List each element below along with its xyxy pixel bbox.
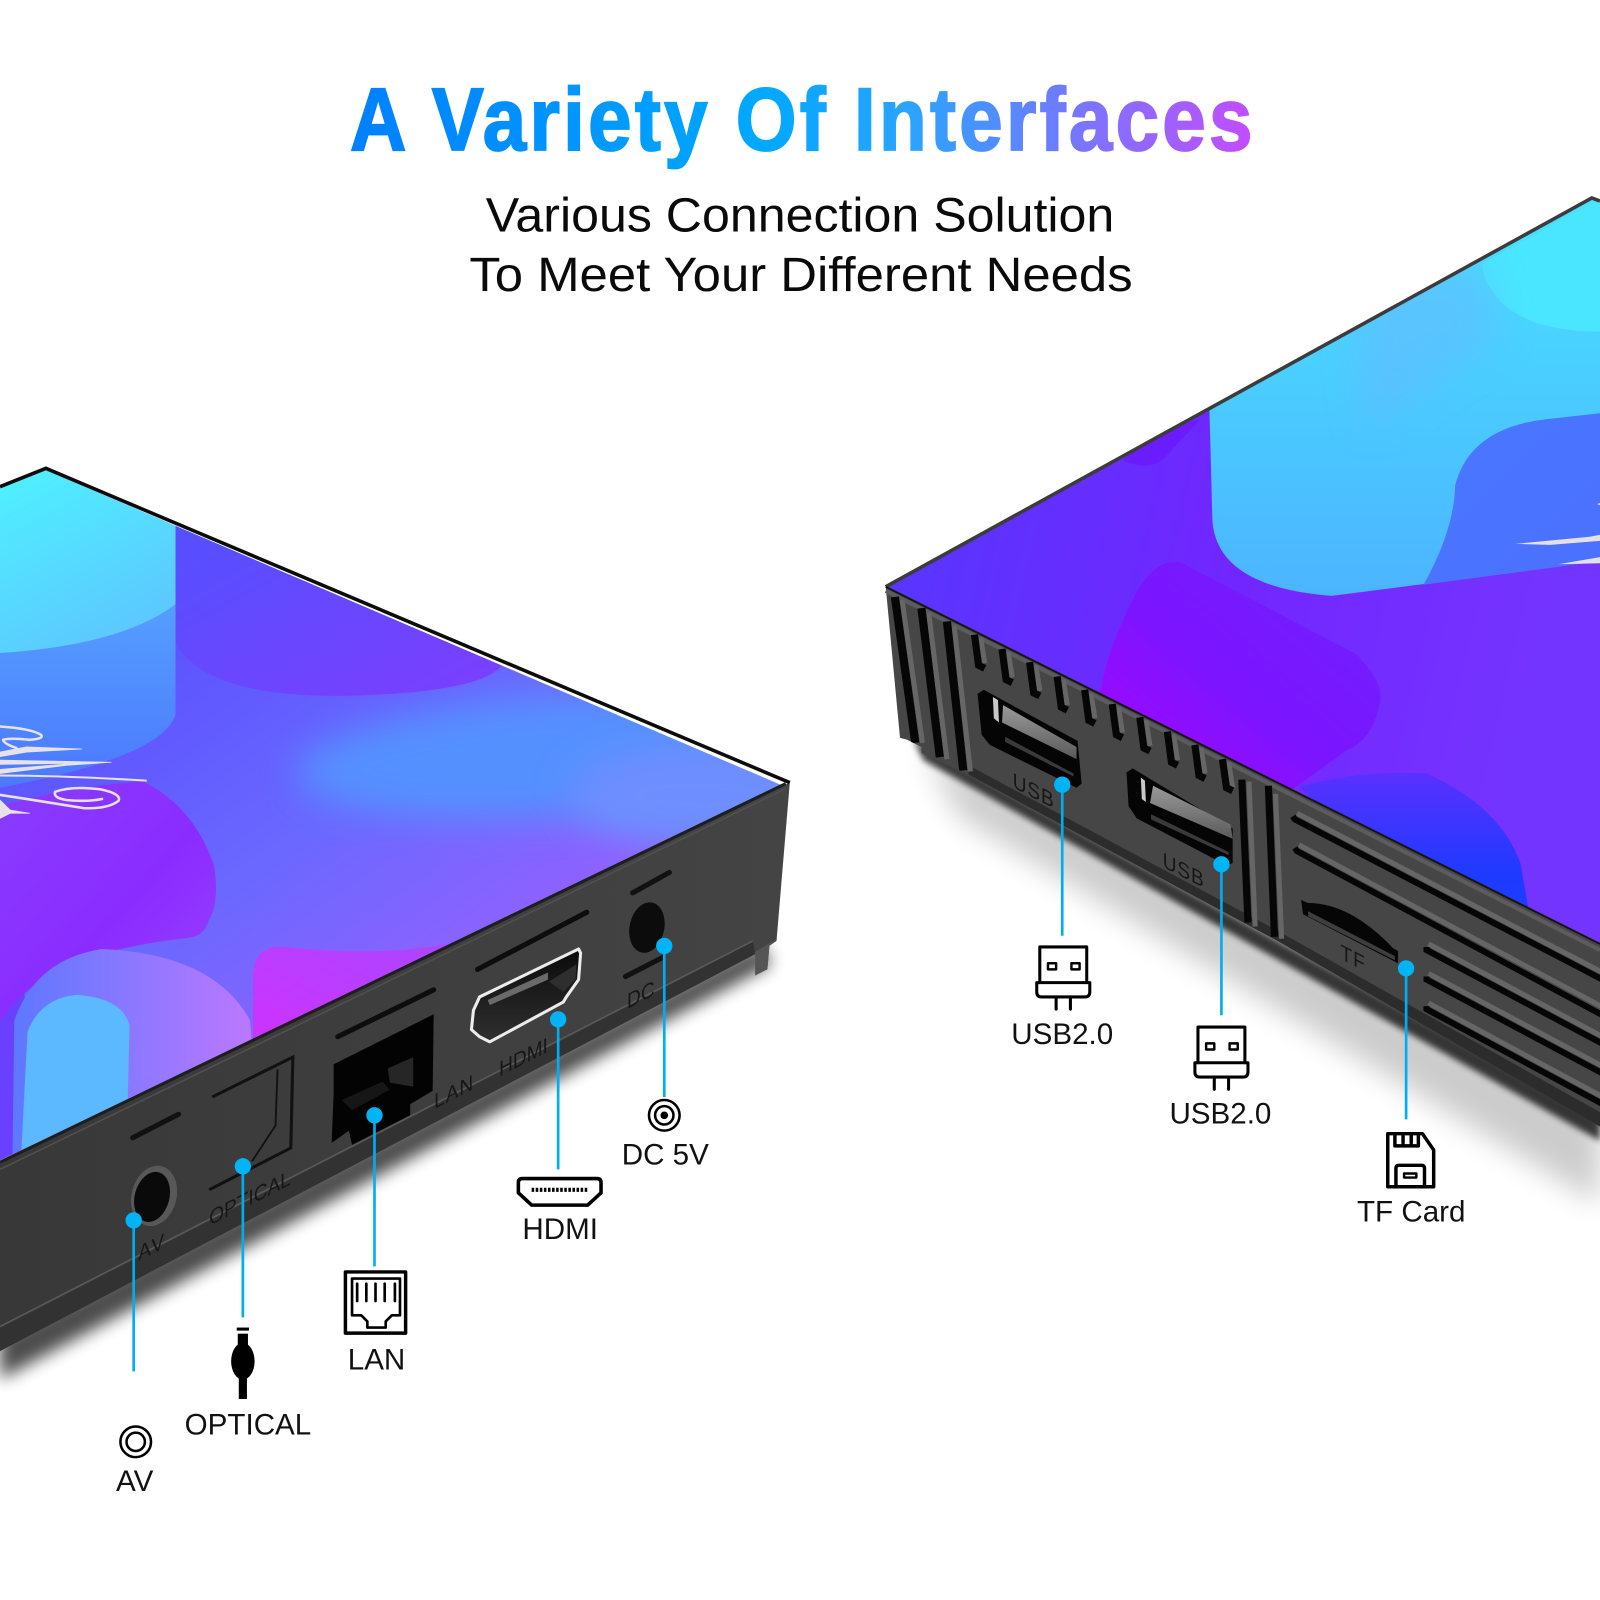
- callout: DC 5V: [622, 938, 709, 1171]
- callout: LAN: LAN: [348, 1343, 405, 1376]
- USB port two: [1127, 768, 1233, 893]
- right box body: [886, 587, 1600, 1127]
- callout: AV: AV: [116, 1465, 154, 1498]
- icon: DC jack: [649, 1100, 680, 1131]
- AV port: [124, 1114, 184, 1266]
- optical port: [209, 1057, 293, 1231]
- DC port: DC: [627, 976, 655, 1014]
- callout: USB2.0 second: USB2.0: [1169, 1097, 1271, 1130]
- title: A Variety Of Interfaces: [350, 69, 1252, 169]
- USB port one: USB: [1013, 768, 1055, 814]
- callout: USB2.0 first: USB2.0: [1011, 1018, 1113, 1051]
- subtitle: Various Connection Solution: [486, 189, 1114, 243]
- icon: AV ring: [120, 1427, 151, 1457]
- callout: OPTICAL: OPTICAL: [185, 1409, 311, 1442]
- left box top screen art: [0, 470, 780, 1160]
- LAN port: [332, 990, 474, 1145]
- left TV box: [0, 449, 851, 1351]
- right TV box: [878, 184, 1600, 1127]
- shadow under left box: [0, 944, 771, 1380]
- callout: HDMI: HDMI: [522, 1213, 598, 1246]
- left box edges: [0, 468, 790, 1169]
- callout: AV: [116, 1212, 154, 1498]
- TF card slot: [1301, 900, 1398, 977]
- callout: HDMI: [518, 1011, 601, 1246]
- callout: LAN: [345, 1107, 406, 1376]
- icon: optical plug: [231, 1328, 255, 1399]
- subtitle: [469, 189, 1133, 302]
- right box edges: [886, 198, 1600, 950]
- HDMI port: HDMI: [499, 1033, 548, 1082]
- icon: USB plug: [1037, 947, 1090, 1009]
- icon: USB plug second: [1195, 1027, 1248, 1089]
- left box body: [0, 783, 790, 1351]
- optical port: OPTICAL: [209, 1165, 291, 1231]
- logo swirl on right box: [1515, 503, 1600, 564]
- right box ventilation ribs: [895, 597, 1600, 1109]
- logo swirl on left box: [0, 727, 146, 818]
- subtitle: To Meet Your Different Needs: [469, 248, 1133, 302]
- callout: USB2.0 second: [1169, 856, 1271, 1130]
- HDMI port: [471, 912, 587, 1082]
- callout: OPTICAL: [185, 1158, 311, 1442]
- LAN port: LAN: [434, 1070, 474, 1114]
- icon: ethernet jack: [345, 1272, 406, 1333]
- USB port one: [978, 690, 1082, 814]
- right box shadow: [913, 740, 1600, 1204]
- USB port two: USB: [1163, 848, 1205, 893]
- icon: HDMI connector: [518, 1179, 601, 1205]
- icon: floppy card: [1388, 1134, 1434, 1187]
- AV port: AV: [138, 1228, 166, 1266]
- callout: DC 5V: DC 5V: [622, 1138, 709, 1171]
- callout: TF Card: TF Card: [1357, 1195, 1465, 1228]
- right box top screen art: [878, 184, 1600, 949]
- TF card slot: TF: [1341, 940, 1366, 977]
- callout: TF Card: [1357, 960, 1465, 1228]
- DC port: [625, 872, 669, 1014]
- callout: USB2.0 first: [1011, 777, 1113, 1051]
